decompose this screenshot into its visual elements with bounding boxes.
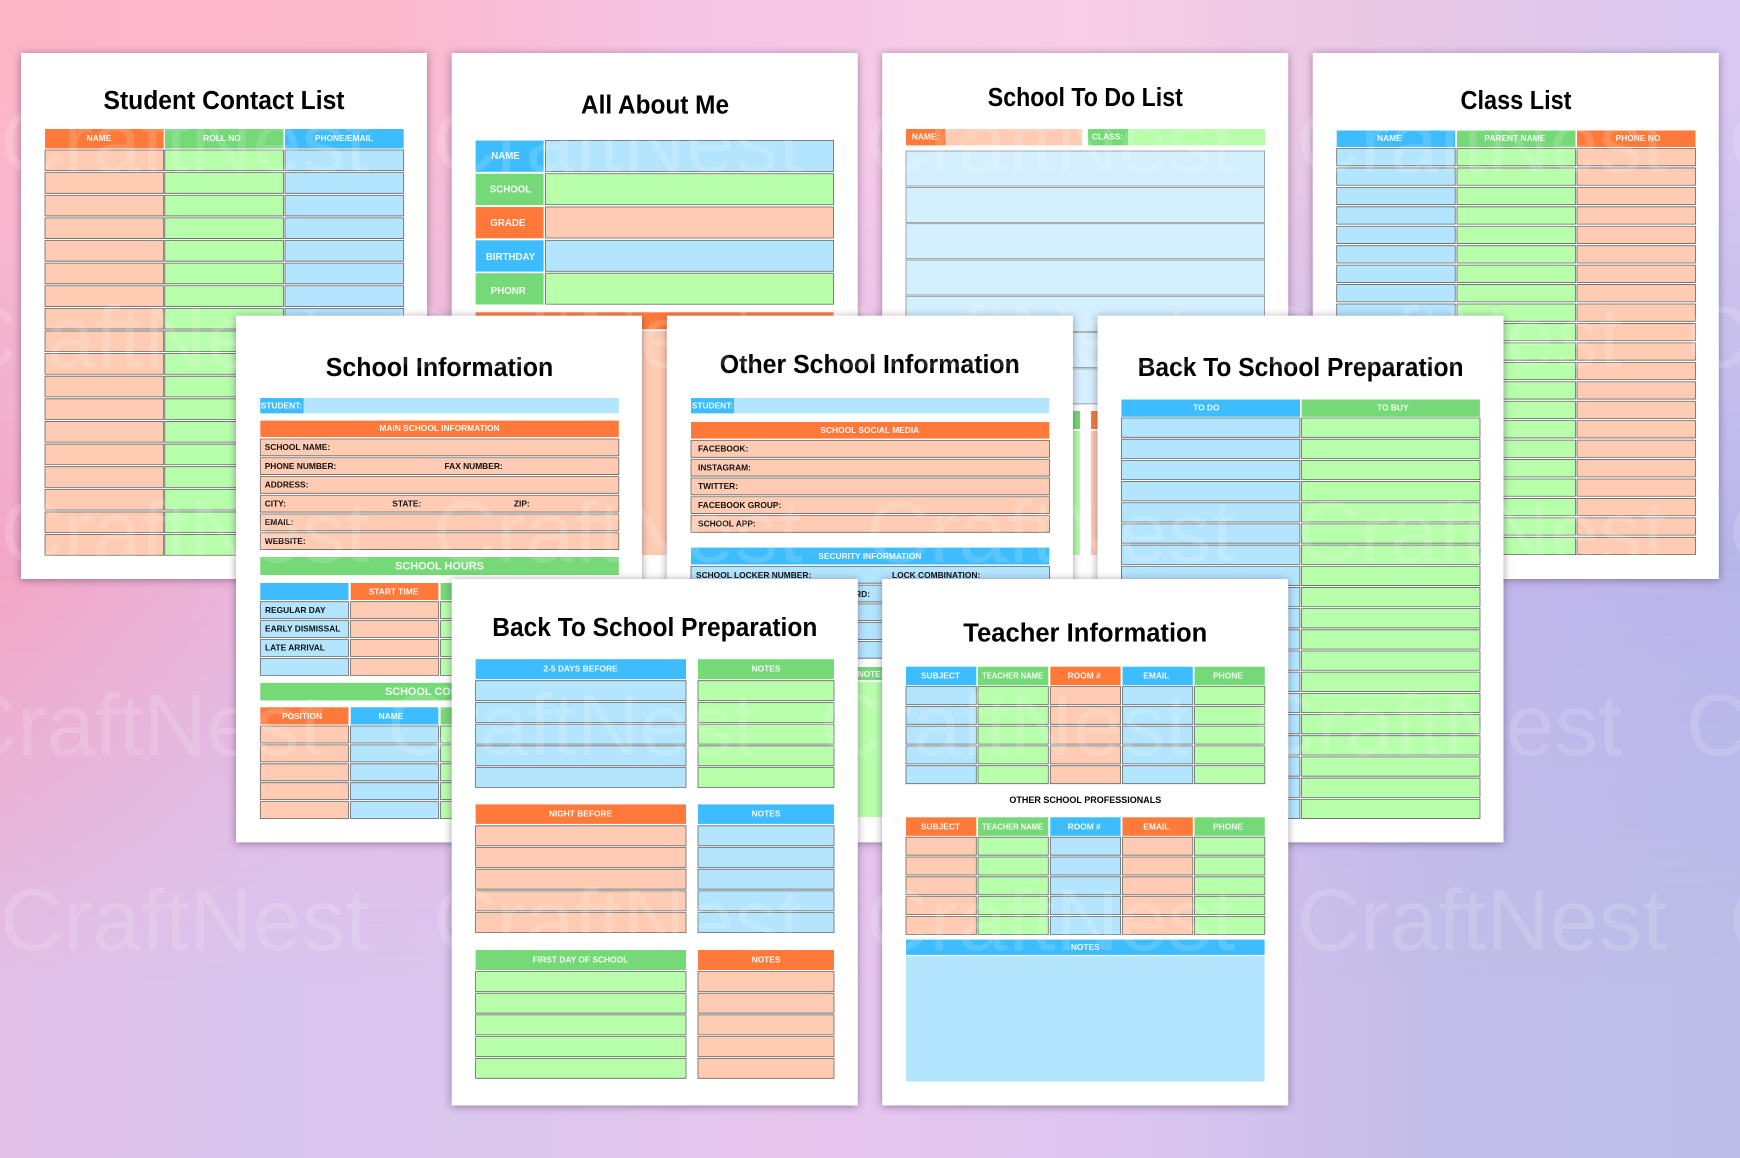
security information section: SCHOOL LOCKER NUMBER:: [696, 570, 811, 580]
heading: School To Do List: School To Do List: [988, 84, 1183, 112]
teacher table: PHONE: [1213, 671, 1243, 681]
school hours section: START TIME: [369, 586, 419, 596]
school social media section: [691, 422, 1050, 532]
professionals table: TEACHER NAME: [982, 822, 1043, 832]
panel: Teacher Information: [882, 579, 1288, 1106]
notes box: NOTES: [1071, 942, 1100, 952]
background: top gradient band: [0, 0, 1740, 431]
professionals table: [906, 817, 1265, 934]
table header: [45, 129, 404, 148]
heading: Class List: Class List: [1460, 87, 1572, 115]
school hours section: REGULAR DAY: [265, 605, 326, 615]
block: first day of school: FIRST DAY OF SCHOOL: [533, 954, 628, 964]
watermark: CraftNest: CraftNest: [820, 288, 1190, 386]
security information section: LOCK COMBINATION:: [892, 570, 980, 580]
panel: Class List: [1313, 53, 1719, 579]
block: night before: NIGHT BEFORE: [549, 809, 613, 819]
panel: Back To School Preparation, day checklists: [452, 579, 858, 1106]
school hours section: SCHOOL HOURS: [395, 560, 484, 572]
partially hidden notes section: NOTES: [858, 669, 887, 679]
background: middle gradient band: [0, 298, 1740, 898]
main school information section: ZIP:: [514, 498, 530, 508]
student field: [691, 398, 1049, 413]
school social media section: FACEBOOK:: [698, 444, 748, 454]
school social media section: TWITTER:: [698, 481, 738, 491]
watermark: CraftNest: CraftNest: [0, 871, 370, 969]
school contacts section: SCHOOL CONTACTS: [385, 686, 494, 698]
table header: [1337, 130, 1696, 147]
student field: STUDENT:: [261, 400, 302, 410]
notes box: [906, 940, 1265, 1082]
main school information section: [260, 421, 619, 550]
professionals table: EMAIL: [1143, 822, 1169, 832]
watermark: CraftNest: CraftNest: [1297, 483, 1667, 581]
security information section: [691, 548, 1050, 658]
professionals table: SUBJECT: [921, 822, 961, 832]
school social media section: SCHOOL APP:: [698, 518, 756, 528]
watermark: CraftNest: CraftNest: [820, 676, 1190, 774]
watermark: CraftNest: [0, 93, 1740, 969]
professionals table: ROOM #: [1068, 822, 1101, 832]
main school information section: STATE:: [392, 498, 421, 508]
partially hidden notes section: [691, 667, 1049, 817]
heading: School Information: School Information: [326, 354, 553, 382]
watermark: CraftNest: CraftNest: [433, 93, 803, 191]
panel: Other School Information: [667, 316, 1073, 842]
main school information section: SCHOOL NAME:: [265, 442, 330, 452]
main school information section: CITY:: [265, 498, 286, 508]
heading: Back To School Preparation: Back To School Preparation: [492, 614, 817, 642]
student field: [260, 398, 619, 413]
watermark: CraftNest: CraftNest: [1297, 871, 1667, 969]
watermark: CraftNest: CraftNest: [433, 483, 803, 581]
watermark: CraftNest: CraftNest: [1297, 93, 1667, 191]
security information section: SECURITY INFORMATION: [818, 551, 921, 561]
main school information section: PHONE NUMBER:: [265, 461, 336, 471]
table header: ROLL NO: [203, 133, 241, 143]
block: first day of school: [476, 950, 834, 1078]
watermark: CraftNest: CraftNest: [0, 483, 370, 581]
name and class fields: CLASS:: [1092, 132, 1123, 142]
watermark: CraftNest: CraftNest: [1253, 288, 1623, 386]
name and class fields: [906, 129, 1265, 145]
label column: GRADE: [490, 218, 526, 229]
panel: All About Me: [452, 53, 858, 579]
table header: NAME: [87, 133, 112, 143]
student field: STUDENT:: [692, 400, 733, 410]
school contacts section: [260, 683, 619, 819]
table header: TO DO: [1193, 403, 1220, 413]
table header: TO BUY: [1377, 403, 1409, 413]
block: 2-5 days before: NOTES: [752, 663, 781, 673]
answer fields: [546, 140, 834, 304]
teacher table: ROOM #: [1068, 671, 1101, 681]
watermark: CraftNest: CraftNest: [0, 93, 370, 191]
teacher table: TEACHER NAME: [982, 671, 1043, 681]
heading: All About Me: All About Me: [581, 92, 729, 120]
watermark: CraftNest: CraftNest: [433, 871, 803, 969]
panel: Back To School Preparation, to do and to buy: [1098, 316, 1504, 842]
block: 2-5 days before: [476, 659, 834, 788]
school hours section: EARLY DISMISSAL: [265, 624, 340, 634]
main school information section: MAIN SCHOOL INFORMATION: [379, 423, 500, 433]
heading: Teacher Information: Teacher Information: [963, 620, 1207, 648]
main school information section: ADDRESS:: [265, 480, 308, 490]
heading: Back To School Preparation: Back To School Preparation: [1138, 354, 1464, 382]
school contacts section: NAME: [379, 711, 404, 721]
main school information section: EMAIL:: [265, 517, 294, 527]
table rows: [45, 150, 404, 555]
teacher table: SUBJECT: [921, 671, 961, 681]
school hours section: [260, 557, 619, 675]
main school information section: FAX NUMBER:: [444, 461, 503, 471]
teacher table: EMAIL: [1143, 671, 1169, 681]
watermark: CraftNest: CraftNest: [866, 483, 1236, 581]
school hours section: LATE ARRIVAL: [265, 643, 325, 653]
heading: Other School Information: Other School Information: [720, 351, 1020, 379]
to do rows: [906, 151, 1264, 404]
panel: Student Contact List: [21, 53, 427, 579]
school contacts section: POSITION: [282, 711, 322, 721]
watermark: CraftNest: CraftNest: [1253, 676, 1623, 774]
table header: [1121, 400, 1480, 417]
main school information section: WEBSITE:: [265, 536, 306, 546]
table rows: [1337, 148, 1696, 555]
table header: PHONE NO: [1616, 133, 1661, 143]
block: night before: [476, 804, 834, 933]
school social media section: INSTAGRAM:: [698, 462, 751, 472]
table header: PHONE/EMAIL: [315, 133, 373, 143]
watermark: CraftNest: CraftNest: [866, 871, 1236, 969]
subheading: other school professionals: OTHER SCHOOL PROFESSIONALS: [1009, 795, 1161, 805]
table rows: [1121, 418, 1480, 819]
table header: NAME: [1377, 133, 1402, 143]
label column: [476, 140, 544, 304]
partially hidden lower columns: [906, 411, 1265, 555]
panel: School Information: [236, 316, 642, 842]
table header: PARENT NAME: [1484, 133, 1546, 143]
partially hidden orange section: [476, 312, 834, 555]
block: 2-5 days before: 2-5 DAYS BEFORE: [543, 663, 618, 673]
watermark: CraftNest: CraftNest: [866, 93, 1236, 191]
block: night before: NOTES: [752, 809, 781, 819]
block: first day of school: NOTES: [752, 954, 781, 964]
name and class fields: NAME:: [912, 132, 939, 142]
school social media section: FACEBOOK GROUP:: [698, 500, 781, 510]
watermark: CraftNest: CraftNest: [387, 288, 757, 386]
heading: Student Contact List: Student Contact List: [104, 87, 345, 115]
label column: PHONR: [491, 286, 526, 297]
school social media section: SCHOOL SOCIAL MEDIA: [820, 425, 919, 435]
label column: NAME: [491, 151, 520, 162]
label column: SCHOOL: [490, 184, 531, 195]
panel: School To Do List: [882, 53, 1288, 579]
label column: BIRTHDAY: [486, 252, 536, 263]
teacher table: [906, 667, 1265, 784]
security information section: LOCKER PASSWORD:: [781, 589, 870, 599]
watermark: CraftNest: CraftNest: [387, 676, 757, 774]
professionals table: PHONE: [1213, 822, 1243, 832]
